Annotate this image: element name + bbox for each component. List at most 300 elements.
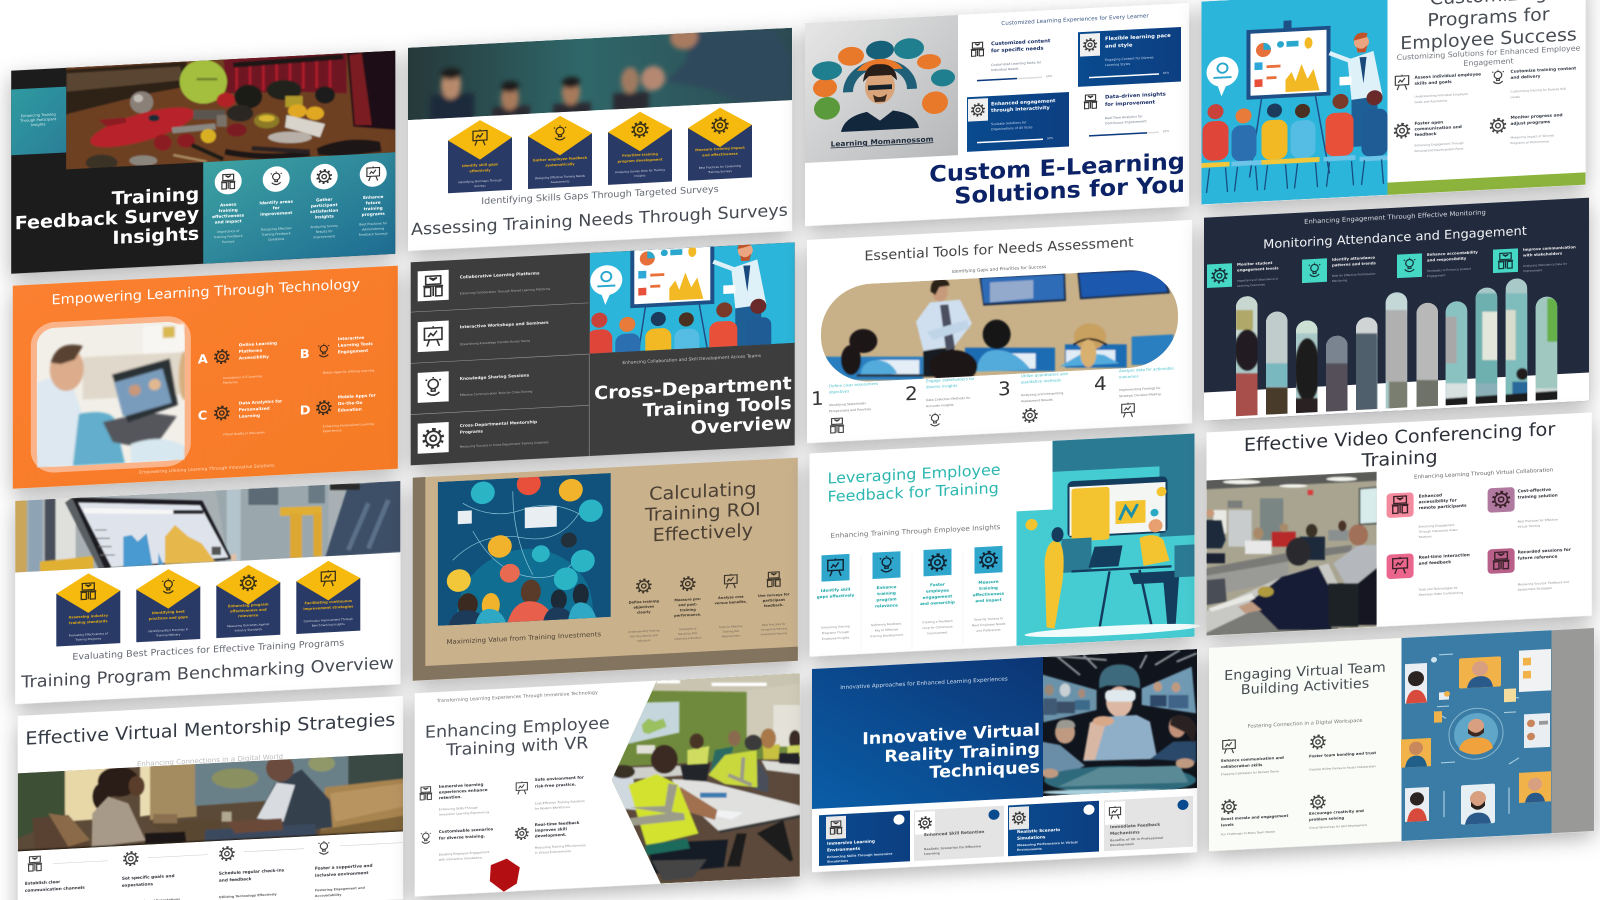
tool list: Measuring Success in Cross-Department Training Initiatives xyxy=(460,440,549,449)
feature list A B C D xyxy=(198,334,377,440)
numbered steps: 3 xyxy=(998,377,1011,400)
teal items panel: improvement xyxy=(260,210,292,217)
title: Feedback Survey xyxy=(15,204,199,234)
features: Understanding Individual Employee xyxy=(1414,92,1468,99)
feature list A B C D: A xyxy=(198,351,208,366)
panel: Calculating Training ROI Effectively xyxy=(413,458,798,683)
chevron boxes: and effectiveness xyxy=(702,152,738,157)
title: Effective Virtual Mentorship Strategies xyxy=(25,710,395,750)
chevron boxes: Training Delivery xyxy=(155,632,181,638)
features: feedback. xyxy=(764,603,784,608)
numbered steps: Utilize quantitative and xyxy=(1021,371,1068,378)
teal items panel: Administering xyxy=(362,227,384,232)
features: and ownership xyxy=(920,600,955,606)
chevron boxes: Continuous Improvement Through xyxy=(304,617,353,623)
tool list: Effective Communication Tools for Cross-Training xyxy=(460,389,533,397)
features: Enhancing Training xyxy=(821,624,850,630)
features: Measurement xyxy=(722,634,740,638)
feature cards: Development xyxy=(1110,842,1134,847)
photo: mentoring conversation xyxy=(18,753,403,852)
chevron boxes: Identifying Best Practices in xyxy=(148,627,189,633)
features xyxy=(1207,244,1576,289)
panel: Cross-Department Training Tools xyxy=(411,223,795,465)
slide background xyxy=(1207,412,1592,636)
feature: data-driven insights: Real-Time Analytics for xyxy=(1105,114,1143,120)
teal items panel: training xyxy=(364,205,383,211)
numbered steps xyxy=(811,366,1174,434)
features: Analyzing Attendance Data for xyxy=(1523,262,1568,268)
title: Training Program Benchmarking Overview xyxy=(20,654,394,693)
feature: data-driven insights: Continuous Improvement xyxy=(1105,119,1147,125)
slide background xyxy=(408,28,792,251)
slide background xyxy=(415,673,800,896)
chevron boxes: Benchmarking Insights xyxy=(312,622,345,628)
feature list A B C D: Experiences xyxy=(323,428,342,433)
slide background xyxy=(18,696,403,900)
photo: pointing manager xyxy=(408,28,792,120)
feature list: Customizable scenarios xyxy=(439,826,494,834)
feature: enhanced engagement: Organizations of All Sizes xyxy=(991,125,1033,131)
feature list: Real-time feedback xyxy=(535,820,580,827)
activity list: Engaging Icebreakers for Remote Teams xyxy=(1221,769,1280,776)
features: and responsibility xyxy=(1427,256,1467,263)
strategy items: Establish clear xyxy=(25,879,61,886)
features: patterns and trends xyxy=(1332,260,1377,267)
slide background xyxy=(413,458,798,681)
numbered steps: Assessment Results xyxy=(1021,398,1053,403)
feature list: retention. xyxy=(439,794,462,800)
features: Identify attendance xyxy=(1332,255,1376,262)
features: Improvement xyxy=(927,630,948,635)
features: Identify skill xyxy=(821,587,851,593)
feature list: Safe environment for xyxy=(535,775,584,782)
photo: tablet with charts xyxy=(15,481,400,572)
feature list A B C D: C xyxy=(198,408,207,423)
subtitle block: Through Participant xyxy=(19,117,57,123)
title: Engaging Virtual Team xyxy=(1224,660,1386,684)
title: Training Tools xyxy=(643,393,792,421)
features: adjust programs xyxy=(1510,119,1551,126)
feature: flexible pace: 85% xyxy=(1163,71,1170,75)
feature cards: Cost-effective xyxy=(1518,487,1551,493)
features: Enhance accountability xyxy=(1427,249,1478,257)
illustration: remote team avatars xyxy=(1401,630,1552,841)
title: Insights xyxy=(112,224,199,249)
feature cards: future reference xyxy=(1518,554,1558,561)
feature list A B C D: D xyxy=(300,402,311,417)
chevron boxes: Evaluating Effectiveness of xyxy=(69,631,109,637)
feature list: risk-free practice. xyxy=(535,782,577,789)
features: and Preferences xyxy=(976,628,1001,633)
feature cards: Assessment Strategies xyxy=(1518,586,1552,592)
teal items panel: Training Feedback xyxy=(261,231,291,237)
features: Personalized Development Plans xyxy=(1414,147,1464,153)
feature list: Measuring Training Effectiveness xyxy=(535,843,586,850)
grey side strip xyxy=(1552,628,1594,833)
tool list: Collaborative Learning Platforms xyxy=(460,271,540,280)
feature list xyxy=(419,775,586,863)
photo: training equipment xyxy=(66,50,396,170)
features xyxy=(628,571,790,643)
title: Feedback for Training xyxy=(827,479,999,506)
title: Innovative Virtual xyxy=(862,721,1040,749)
feature cards: Environments xyxy=(1017,847,1042,852)
feature: enhanced engagement: through interactivity xyxy=(991,105,1051,114)
feature cards: Tools and Technologies for xyxy=(1418,586,1459,592)
brown border xyxy=(413,458,798,681)
feature: customized content: Individual Needs xyxy=(991,67,1019,72)
feature list A B C D: Mobile Apps for xyxy=(338,393,377,399)
panel: Training Feedback Survey Insights xyxy=(11,25,400,274)
features: performance. xyxy=(674,613,701,618)
feature cards: Simulations xyxy=(1017,834,1046,841)
features: Foster open xyxy=(1414,119,1443,126)
numbered steps: objectives xyxy=(829,389,849,394)
numbered steps: Perspectives and Priorities xyxy=(829,407,871,413)
feature list A B C D: Enhancing Personalized Learning xyxy=(323,422,374,428)
feature list A B C D: Learning xyxy=(239,413,260,419)
chevron boxes: training standards xyxy=(69,619,108,625)
teal items panel: Surveys xyxy=(222,239,235,244)
activity list: Boost morale and engagement xyxy=(1221,813,1289,821)
teal items panel: Enhance xyxy=(363,194,384,200)
numbered steps: diverse insights xyxy=(926,383,957,389)
title: Calculating xyxy=(649,479,757,505)
strategy items: Set specific goals and xyxy=(122,873,175,881)
strategy items: Utilizing Technology Effectively xyxy=(219,892,278,899)
features: Programs Through xyxy=(822,630,849,635)
features: Creating a Feedback xyxy=(922,619,953,624)
features: Investment Returns xyxy=(761,631,788,636)
feature list: in Virtual Environments xyxy=(535,849,571,855)
teal items panel: Analyzing Survey xyxy=(310,224,338,229)
features: Measuring Impact of Tailored xyxy=(1510,133,1554,140)
features: versus benefits. xyxy=(715,600,747,605)
teal items panel: training xyxy=(219,207,238,213)
features: and impact xyxy=(975,597,1002,603)
feature cards: Recorded sessions for xyxy=(1518,547,1572,555)
strategy items: Foster a supportive and xyxy=(315,863,373,871)
chevron boxes: Assessments xyxy=(551,179,570,184)
features: engagement levels xyxy=(1237,265,1279,272)
slide background xyxy=(13,266,398,489)
features: Improvement xyxy=(1523,268,1543,273)
features: Meet Employee Needs xyxy=(972,622,1006,627)
feature list: development. xyxy=(535,832,567,838)
chevron boxes: improvement strategies xyxy=(303,605,353,611)
teal items panel: Questions xyxy=(268,237,285,242)
features: Training Development xyxy=(869,633,904,638)
feature list: with Interactive Simulations xyxy=(439,856,482,862)
slide background xyxy=(810,433,1194,657)
feature list A B C D: Platforms xyxy=(223,380,238,385)
features: Role for Effective Participation xyxy=(1332,272,1376,278)
teal items panel: programs xyxy=(362,211,385,217)
illustration: learning network xyxy=(438,473,611,626)
chevron boxes: Surveys xyxy=(474,184,486,188)
strategy items: communication channels xyxy=(25,885,85,893)
features: Understanding Training xyxy=(628,628,660,634)
feature cards: Realistic Scenario xyxy=(1017,827,1060,834)
panel: Empowering Learning Through Technology xyxy=(13,266,398,489)
feature list A B C D: Interactive xyxy=(338,335,364,341)
slide background xyxy=(807,220,1192,443)
features: Improve communication xyxy=(1523,244,1576,252)
numbered steps: Analyze data for actionable xyxy=(1119,366,1174,373)
features: with stakeholders xyxy=(1523,251,1563,258)
slide background xyxy=(1202,0,1586,205)
photo: VR command room xyxy=(1043,649,1197,796)
feature list A B C D: Data Analytics for xyxy=(239,398,283,406)
subtitle block: Enhancing Training xyxy=(21,112,56,118)
feature cards: remote participants xyxy=(1419,503,1467,510)
chevron boxes: Best Practices for Conducting xyxy=(699,164,741,170)
feature: flexible pace: Learning Styles xyxy=(1105,62,1131,67)
feature: enhanced engagement xyxy=(967,92,1069,152)
strategy items: expectations xyxy=(122,881,154,888)
feature cards: accessibility for xyxy=(1419,498,1458,504)
chevron boxes: Designing Effective Training Needs xyxy=(535,174,586,180)
subtitle: Transforming Learning Experiences Through Immersive Technology xyxy=(436,690,598,704)
features: relevance xyxy=(875,602,898,609)
feature cards: Best Practices for Effective xyxy=(1518,518,1558,524)
title: Training xyxy=(1361,447,1438,472)
feature: customized content: 60% xyxy=(1046,74,1053,78)
feature list: experiences enhance xyxy=(439,787,488,795)
title: Monitoring Attendance and Engagement xyxy=(1263,223,1527,251)
title: Training xyxy=(112,185,199,209)
feature list A B C D: Engagement xyxy=(338,348,368,354)
features: ROI: Key Metrics and xyxy=(630,633,658,638)
features: Enhance xyxy=(877,584,897,590)
chevron boxes: Identify skill gaps xyxy=(462,162,498,168)
chevron boxes: Assessing industry xyxy=(69,614,109,620)
tool list: Cross-Departmental Mentorship xyxy=(460,419,537,428)
features: effectiveness xyxy=(973,591,1005,597)
features: Employee Insights xyxy=(822,636,850,641)
feature: enhanced engagement: 90% xyxy=(1047,136,1054,140)
feature: flexible pace xyxy=(1078,27,1181,87)
strategy items: Accountability xyxy=(315,893,342,898)
feature cards: Virtual Training xyxy=(1518,524,1540,529)
feature: flexible pace: Flexible learning pace xyxy=(1105,33,1171,42)
feature cards: Measuring Performance in Virtual xyxy=(1017,840,1078,847)
features: Loop for Continuous xyxy=(922,625,953,630)
features: Strategies to xyxy=(679,626,697,631)
teal items panel xyxy=(203,152,395,264)
features: Monitoring xyxy=(1332,278,1348,283)
feature list: Immersive Learning Experiences xyxy=(439,810,490,817)
chevron boxes: Measuring Outcomes Against xyxy=(227,622,270,628)
teal items panel: for xyxy=(273,205,281,210)
subtitle block: Insights xyxy=(31,122,46,127)
title: Effective Video Conferencing for xyxy=(1244,420,1556,456)
chevron boxes: Training Surveys xyxy=(707,169,732,174)
subtitle: Engagement xyxy=(1463,57,1514,68)
features: Indicators xyxy=(637,638,651,643)
feature: flexible pace: and style xyxy=(1105,42,1133,50)
title: Custom E-Learning xyxy=(929,148,1185,188)
feature cards: Mechanisms xyxy=(1110,829,1140,836)
feature list A B C D: Personalized xyxy=(239,406,270,412)
slide background xyxy=(15,481,400,704)
subtitle: Maximizing Value from Training Investments xyxy=(446,630,602,646)
teal items panel: Feedback Surveys xyxy=(359,231,388,237)
panel: Monitoring Attendance and Engagement xyxy=(1204,198,1589,438)
feature cards xyxy=(1387,484,1572,598)
panel: Assessing Training Needs Through Surveys xyxy=(408,19,792,251)
features: Measure xyxy=(978,579,999,585)
feature list A B C D: Platforms xyxy=(239,348,263,354)
numbered steps: Strategic Decision-Making xyxy=(1119,392,1161,398)
numbered steps: Define clear assessment xyxy=(829,381,879,388)
chevron boxes: practices and gaps xyxy=(149,615,188,621)
feature: enhanced engagement: Enhanced engagement xyxy=(991,98,1056,107)
activity list: Creative Online Games to Foster Collaboration xyxy=(1309,764,1376,772)
chevron boxes: Training Programs xyxy=(74,636,102,642)
feature cards: Environments xyxy=(827,846,861,852)
chevron boxes: effectively xyxy=(469,168,491,173)
features: and delivery xyxy=(1510,74,1541,80)
feature list A B C D: Online Learning xyxy=(239,340,277,347)
teal items panel: Training Feedback xyxy=(213,234,243,239)
teal items panel: Best Practices for xyxy=(359,221,388,227)
feature cards: Enhanced Skill Retention xyxy=(924,829,984,837)
chevron boxes: Insights xyxy=(634,173,646,178)
features: Engagement xyxy=(1427,273,1446,278)
numbered steps: 1 xyxy=(811,387,824,410)
chevron boxes: effectiveness and xyxy=(230,608,267,613)
chevron boxes: Identifying best xyxy=(152,610,185,615)
feature list A B C D: Learning Tools xyxy=(338,341,373,348)
features: and post- xyxy=(678,602,698,607)
panel: Effective Video Conferencing xyxy=(1205,412,1592,652)
illustration: learner head with bubbles xyxy=(805,15,958,163)
arch photo slices xyxy=(1236,278,1558,416)
features: Goals and Aspirations xyxy=(1414,99,1448,104)
activity list: Fun Challenges to Boost Team Morale xyxy=(1221,830,1275,836)
feature cards: Simulations xyxy=(827,859,848,864)
tool list: Enhancing Collaboration Through Shared Learning Platforms xyxy=(460,287,551,295)
features: employee xyxy=(926,588,949,594)
feature list A B C D: Mobile Apps for Lifelong Learning xyxy=(323,368,374,375)
feature: data-driven insights: for improvement xyxy=(1105,100,1156,108)
activity list xyxy=(1221,731,1376,836)
illustration: learner head with bubbles: Learning Momannossom xyxy=(831,135,933,149)
activity list: problem solving xyxy=(1309,815,1344,822)
feature cards: Enhanced xyxy=(1419,493,1442,499)
feature list: Cost-Effective Training Solutions xyxy=(535,799,585,806)
panel: Engaging Virtual Team Building Activities xyxy=(1209,628,1594,851)
strategy items: and feedback xyxy=(219,876,252,883)
features: feedback xyxy=(1414,131,1437,137)
strategy items xyxy=(25,837,403,900)
teal items panel: effectiveness xyxy=(212,213,245,219)
features: Use surveys for xyxy=(758,592,790,598)
features: communication and xyxy=(1414,124,1462,131)
strategy items: inclusive environment xyxy=(315,870,368,878)
title: Techniques xyxy=(929,758,1040,783)
feature cards: Immediate Feedback xyxy=(1110,822,1160,829)
features: gaps effectively xyxy=(817,593,855,599)
tool list: Streamlining Knowledge Transfer Across Teams xyxy=(460,339,531,346)
title: Enhancing Employee xyxy=(425,714,610,743)
feature list A B C D: Innovations in E-Learning xyxy=(223,374,262,380)
features: skills and goals xyxy=(1414,79,1452,86)
features: Levels xyxy=(1510,95,1520,99)
chevron boxes xyxy=(448,106,752,193)
chevron boxes: program development xyxy=(617,158,663,164)
subtitle: Customized Learning Experiences for Every Learner xyxy=(1001,13,1149,27)
features: Gathering Feedback: xyxy=(871,622,902,627)
activity list: Encourage creativity and xyxy=(1309,808,1364,816)
feature cards: Through Interactive Video xyxy=(1418,528,1458,534)
teal items panel: Assess xyxy=(220,202,237,207)
subtitle: Customizing Solutions for Enhanced Employee xyxy=(1397,44,1581,62)
teal items panel: Designing Effective xyxy=(261,226,292,232)
panel: Customizing Programs for Employee Success xyxy=(1202,0,1586,205)
title: Training ROI xyxy=(644,500,761,526)
feature cards: Seamless Video Conferencing xyxy=(1419,591,1463,597)
teal items panel: insights xyxy=(315,214,334,219)
features: training xyxy=(877,590,896,596)
panel: Leveraging Employee Feedback xyxy=(810,433,1200,657)
features: Tools for Effective xyxy=(719,624,743,629)
subtitle: Enhancing Engagement Through Effective Monitoring xyxy=(1304,209,1486,226)
strategy items: Schedule regular check-ins xyxy=(219,867,285,876)
feature list A B C D: Virtual Reality in Education xyxy=(223,430,265,436)
title: Assessing Training Needs Through Surveys xyxy=(411,201,788,240)
subtitle: Evaluating Best Practices for Effective Training Programs xyxy=(72,638,344,663)
numbered steps: 4 xyxy=(1094,372,1107,395)
activity list: levels xyxy=(1221,822,1235,827)
panel: Training Program Benchmarking Overview xyxy=(13,458,407,704)
numbered steps: Data Collection Methods for xyxy=(926,396,971,402)
panel: Custom E-Learning Solutions xyxy=(805,3,1189,226)
photo: conference room xyxy=(1206,472,1377,636)
feature cards xyxy=(819,796,1193,866)
subtitle: Enhancing Connections in a Digital World xyxy=(137,753,283,768)
teal items panel: Results for xyxy=(316,229,333,234)
feature list: improves skill xyxy=(535,826,568,833)
features: Training ROI xyxy=(723,629,739,634)
teal items panel: future xyxy=(366,200,381,206)
feature cards: Benefits of VR in Professional xyxy=(1110,836,1163,842)
feature cards: Enhancing Engagement xyxy=(1419,523,1455,529)
footer subtitle: Empowering Lifelong Learning Through Innovative Solutions xyxy=(139,463,275,476)
numbered steps: Engage stakeholders for xyxy=(926,376,975,383)
feature list: Immersive learning xyxy=(439,782,484,789)
subtitle: Enhancing Training Through Employee Insights xyxy=(831,522,1001,540)
tool list: Interactive Workshops and Seminars xyxy=(460,320,549,329)
rounded photo: man on video call xyxy=(31,315,191,474)
slide background xyxy=(11,51,395,274)
teal items panel: and impact xyxy=(215,218,242,225)
features: participant xyxy=(763,598,785,603)
feature: flexible pace: Engaging Content for Diverse xyxy=(1105,56,1154,62)
features: Corporate Education xyxy=(674,636,702,641)
title: Leveraging Employee xyxy=(827,461,1001,487)
teal items panel: Improvement xyxy=(313,234,336,239)
feature cards: Enhancing Skills Through Immersive xyxy=(827,852,892,859)
title: Empowering Learning Through Technology xyxy=(51,277,360,308)
illustration: classroom cropped xyxy=(590,242,795,354)
feature: customized content: for specific needs xyxy=(991,46,1044,54)
subtitle: Enhancing Collaboration and Skill Development Across Teams xyxy=(622,353,762,366)
numbered steps: Analyzing and Interpreting xyxy=(1021,391,1063,397)
features: Customizing Training for Diverse Skill xyxy=(1510,87,1566,94)
tool list xyxy=(411,262,589,465)
